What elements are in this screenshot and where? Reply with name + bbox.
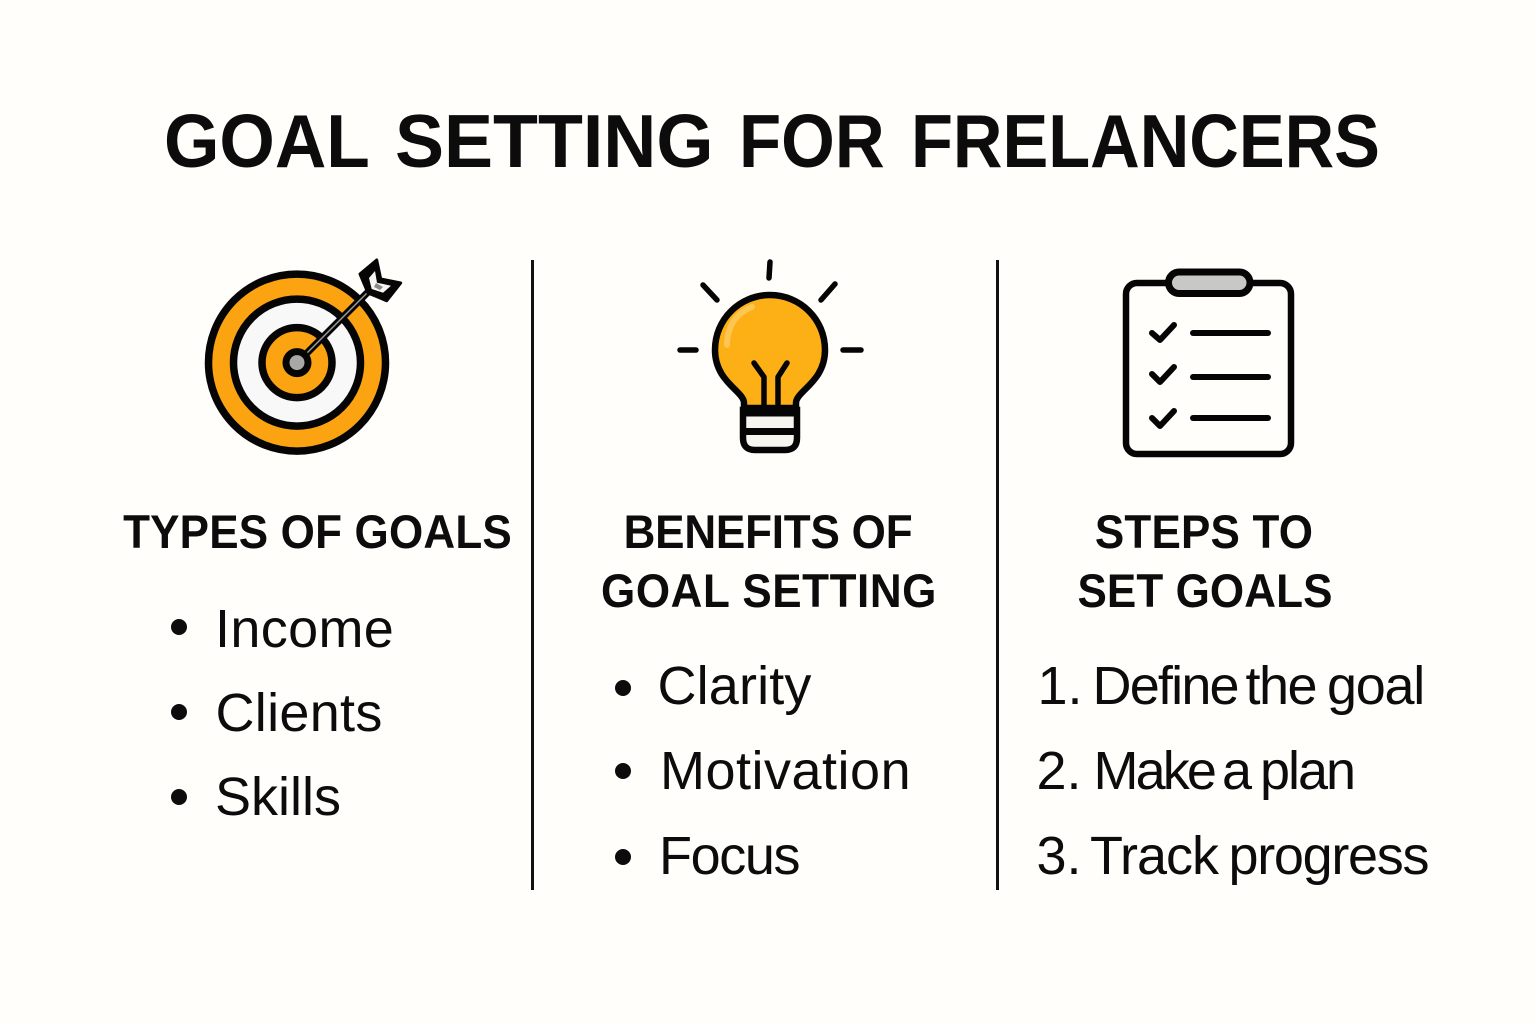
panel: types of goals (123, 258, 512, 827)
panel: benefits: GOAL SETTING (601, 564, 937, 617)
icon: light bulb (677, 259, 864, 454)
numbered list: plan (1260, 740, 1354, 800)
title (164, 99, 1380, 183)
icon: target with arrow (204, 258, 402, 455)
icon: clipboard checklist (1122, 268, 1294, 458)
numbered list: Define (1092, 656, 1238, 716)
heading: TYPES OF GOALS (123, 504, 512, 558)
panel: steps (1036, 268, 1428, 886)
numbered list: 1. (1038, 656, 1083, 716)
numbered list: 3. (1036, 826, 1082, 886)
bullet list: Clients (216, 683, 383, 743)
numbered list (1036, 656, 1428, 886)
numbered list: a (1222, 740, 1252, 800)
title: FRELANCERS (911, 99, 1380, 183)
numbered list: progress (1228, 826, 1428, 886)
numbered list: Track (1090, 826, 1218, 886)
bullet list: Clarity (658, 656, 812, 716)
bullet list: Skills (215, 767, 341, 827)
bullet list: Income (215, 598, 394, 658)
bullet list (171, 598, 394, 827)
numbered list: Make (1094, 740, 1214, 800)
panel: benefits (601, 259, 937, 886)
heading: STEPS TO (1095, 504, 1313, 558)
title: SETTING (395, 99, 714, 183)
title: GOAL (164, 99, 369, 183)
bullet list (615, 656, 911, 886)
bullet list: Focus (659, 826, 799, 886)
title: FOR (739, 99, 885, 183)
numbered list: 2. (1036, 740, 1082, 800)
numbered list: the (1246, 656, 1316, 716)
panel: steps: SET GOALS (1077, 564, 1333, 617)
heading: BENEFITS OF (624, 504, 912, 558)
numbered list: goal (1327, 656, 1424, 716)
bullet list: Motivation (660, 741, 911, 801)
